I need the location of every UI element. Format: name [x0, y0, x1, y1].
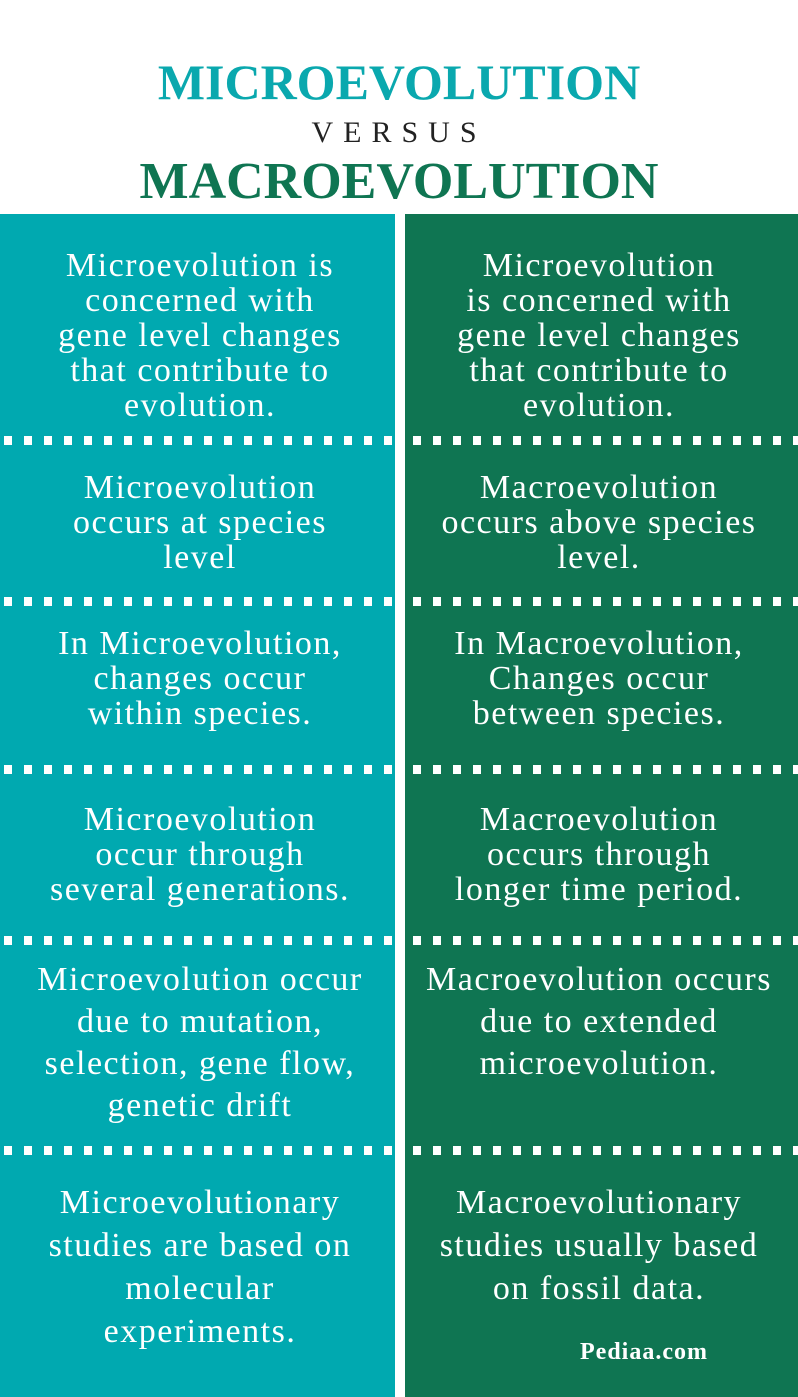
panel: left microevolution	[0, 214, 395, 1397]
logo: pediaa.com: Pediaa.com	[580, 1339, 708, 1365]
text: row 4: occurs through	[487, 836, 711, 873]
text: row 6: Macroevolutionary	[456, 1184, 742, 1221]
text: row 2: occurs above species	[441, 504, 757, 541]
text: row 2: Microevolution	[84, 469, 316, 506]
text: row 2	[73, 469, 327, 576]
text: row 5: Macroevolution occurs	[426, 961, 772, 998]
text: row 5	[426, 961, 772, 1082]
text: row 2: level.	[557, 539, 641, 576]
text: row 2: level	[163, 539, 237, 576]
text: row 1	[58, 247, 342, 424]
text: row 2	[441, 469, 757, 576]
text: row 1: gene level changes	[58, 317, 342, 354]
text: row 1: is concerned with	[466, 282, 732, 319]
text: row 6: molecular	[125, 1270, 275, 1307]
text: row 4	[50, 801, 350, 908]
text: row 6: studies usually based	[440, 1227, 758, 1264]
text: row 5: selection, gene flow,	[45, 1045, 355, 1082]
text: row 4: Microevolution	[84, 801, 316, 838]
text: row 1: Microevolution is	[66, 247, 334, 284]
text: row 6: experiments.	[104, 1313, 296, 1350]
text: row 1: that contribute to	[469, 352, 729, 389]
text: row 3: Changes occur	[489, 660, 709, 697]
text: row 1: that contribute to	[70, 352, 330, 389]
text: row 3	[454, 625, 744, 732]
text: row 3: between species.	[473, 695, 725, 732]
title: macroevolution: MACROEVOLUTION	[140, 153, 658, 210]
text: row 1: concerned with	[85, 282, 315, 319]
text: row 6: studies are based on	[49, 1227, 351, 1264]
text: row 4	[455, 801, 743, 908]
text: row 6: Microevolutionary	[60, 1184, 340, 1221]
text: row 4: Macroevolution	[480, 801, 718, 838]
text: row 5: due to extended	[480, 1003, 718, 1040]
text: row 1: Microevolution	[483, 247, 715, 284]
text: row 2: occurs at species	[73, 504, 327, 541]
text: row 3: In Microevolution,	[58, 625, 342, 662]
text: row 6: on fossil data.	[493, 1270, 705, 1307]
text: row 3: within species.	[88, 695, 312, 732]
text: row 1: gene level changes	[457, 317, 741, 354]
text: row 4: occur through	[95, 836, 305, 873]
text: row 5: microevolution.	[480, 1045, 718, 1082]
text: row 4: several generations.	[50, 871, 350, 908]
title: microevolution: MICROEVOLUTION	[158, 54, 640, 110]
text: row 6	[440, 1184, 758, 1307]
text: row 1	[457, 247, 741, 424]
text: row 6	[49, 1184, 351, 1350]
text: row 3: In Macroevolution,	[454, 625, 744, 662]
text: row 3	[58, 625, 342, 732]
text: row 3: changes occur	[93, 660, 306, 697]
text: row 5: genetic drift	[108, 1087, 292, 1124]
text: row 1: evolution.	[523, 387, 675, 424]
text: row 5: due to mutation,	[77, 1003, 323, 1040]
panel: right macroevolution	[405, 214, 798, 1397]
text: row 5: Microevolution occur	[37, 961, 363, 998]
subtitle: versus: VERSUS	[311, 116, 487, 149]
text: row 2: Macroevolution	[480, 469, 718, 506]
text: row 1: evolution.	[124, 387, 276, 424]
text: row 5	[37, 961, 363, 1124]
text: row 4: longer time period.	[455, 871, 743, 908]
